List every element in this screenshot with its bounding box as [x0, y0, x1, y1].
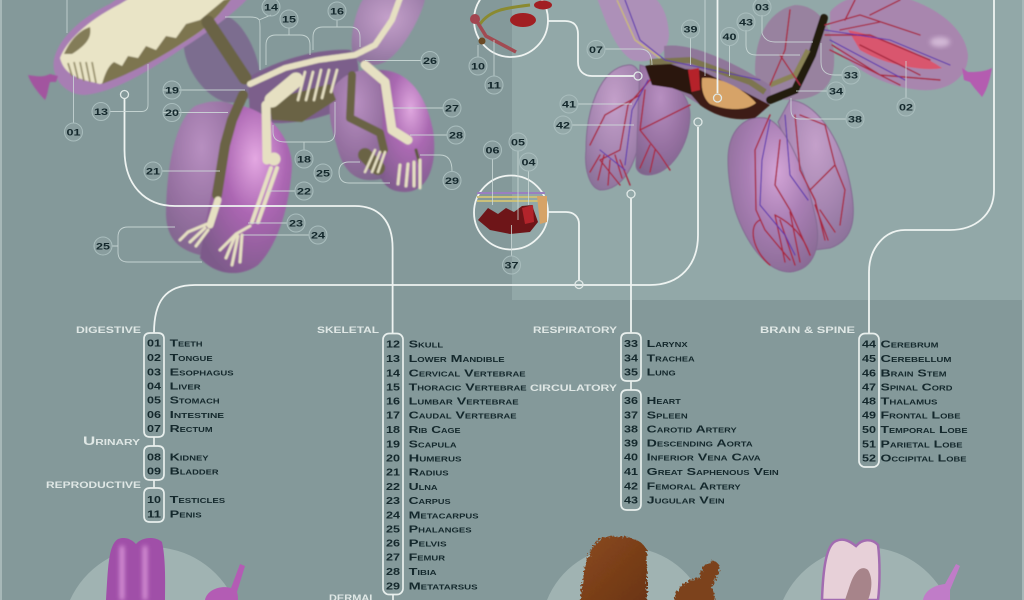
icon: colored aorta stripe	[617, 0, 660, 58]
rows 44-52: 52	[862, 452, 876, 464]
background disc	[783, 547, 947, 600]
rows 33-43: 36	[624, 395, 638, 407]
callout 38	[846, 110, 864, 128]
callout 04	[520, 153, 538, 171]
icon: tail balloon	[597, 0, 669, 61]
anatomy balloon dog	[586, 0, 992, 272]
callout 11: 11	[487, 80, 502, 92]
balloon segments	[106, 538, 165, 600]
cutaway segment	[822, 540, 880, 600]
callout 01: 01	[66, 128, 81, 138]
callout 03	[753, 0, 771, 16]
callout 21	[144, 162, 162, 180]
rows 12-29: 16	[386, 396, 400, 408]
callout 13: 13	[94, 107, 108, 118]
heading: urinary: Urinary	[83, 436, 141, 448]
rows 44-52: 46	[862, 367, 876, 379]
rows 12-29: 19	[386, 438, 400, 450]
rows 44-52: Cerebrum	[880, 339, 939, 351]
rows 12-29: 20	[386, 452, 400, 464]
callout 06	[484, 141, 502, 159]
rows 12-29: Rib Cage	[409, 424, 461, 436]
rows 12-29: Thoracic Vertebrae	[409, 381, 527, 393]
icon: balloon knot	[28, 74, 58, 100]
connector lines	[120, 0, 994, 333]
legend: respiratory and circulatory	[530, 325, 779, 510]
callout 43: 43	[739, 18, 753, 28]
icon: balloon highlight	[930, 37, 950, 47]
rows 12-29: 22	[386, 481, 400, 493]
callout 28: 28	[449, 130, 463, 142]
rows 01-11: 06	[147, 409, 161, 421]
rows 12-29: 18	[386, 424, 400, 436]
rows 12-29: Femur	[409, 552, 445, 564]
skeleton balloon dog	[28, 0, 434, 273]
detail circle: digestive organs	[474, 176, 548, 250]
number brackets	[621, 333, 641, 510]
icon: hind right balloon	[636, 65, 690, 175]
rows 12-29: 26	[386, 538, 400, 550]
callout 41	[560, 95, 578, 113]
icon: body tube	[650, 60, 765, 92]
rows 12-29: Scapula	[409, 438, 457, 450]
callout 28	[447, 126, 465, 144]
heading: brain and spine: BRAIN & SPINE	[760, 325, 855, 336]
callout 15	[280, 10, 298, 28]
callout 16	[328, 2, 346, 20]
rows 12-29: 28	[386, 566, 400, 578]
rows 33-43: 33	[624, 338, 638, 350]
callout 13	[92, 102, 110, 120]
fur groove	[611, 542, 613, 600]
rows 33-43: 34	[624, 352, 638, 364]
rows 12-29: Carpus	[409, 495, 451, 507]
callout 10: 10	[471, 62, 485, 72]
rows 01-11: Esophagus	[170, 366, 234, 378]
callout 27	[443, 99, 461, 117]
rows 44-52: Brain Stem	[880, 367, 947, 379]
callout 11	[485, 76, 503, 94]
rows 33-43: Larynx	[647, 338, 688, 350]
rows 12-29: Metatarsus	[409, 580, 478, 592]
rows 12-29: Lower Mandible	[409, 353, 505, 365]
rows 44-52: Frontal Lobe	[880, 410, 961, 422]
rows 44-52: Cerebellum	[880, 353, 952, 365]
lighter upper-right panel	[512, 0, 1022, 300]
rows 12-29: Ulna	[409, 481, 438, 493]
rows 33-43: 35	[624, 366, 638, 378]
callout 18	[295, 150, 313, 168]
highlights	[122, 546, 145, 600]
icon: head balloon	[830, 0, 968, 90]
icon: far-side bones	[208, 22, 384, 195]
rows 33-43	[624, 338, 779, 506]
icon: near front leg balloon	[200, 105, 292, 273]
rows 12-29: 13	[386, 353, 400, 365]
number bracket	[859, 334, 879, 467]
callout 05	[509, 133, 527, 151]
callout 22	[295, 182, 313, 200]
rows 44-52: 48	[862, 396, 876, 408]
callout 38: 38	[848, 114, 862, 126]
rows 44-52: 49	[862, 410, 876, 422]
rows 01-11: Tongue	[170, 352, 213, 364]
number bracket	[383, 334, 403, 594]
rows 01-11: Teeth	[170, 338, 203, 350]
callout 02	[897, 98, 915, 116]
callout 43	[737, 13, 755, 31]
icon: neck balloon	[184, 16, 260, 103]
callout 25 hind: 25	[316, 168, 331, 180]
rows 12-29: Pelvis	[409, 538, 447, 550]
icon: heart	[687, 68, 700, 92]
callout 24: 24	[311, 230, 326, 242]
rows 33-43: Carotid Artery	[647, 424, 737, 436]
callout 20	[163, 104, 181, 122]
callout 01	[64, 123, 82, 141]
heading: respiratory: RESPIRATORY	[533, 325, 618, 336]
callout 19	[163, 81, 181, 99]
callout 26	[421, 52, 439, 70]
rows 01-11: Kidney	[170, 452, 209, 464]
icon: far hind leg balloon	[329, 70, 389, 180]
rows 44-52: 51	[862, 438, 876, 450]
icon: neck balloon	[755, 5, 834, 100]
rows 44-52: 44	[862, 339, 876, 351]
rows 12-29: 25	[386, 523, 400, 535]
callout 16: 16	[330, 6, 344, 18]
detail circle: reproductive organs	[470, 0, 552, 57]
rows 12-29: 23	[386, 495, 400, 507]
rows 01-11: 08	[147, 452, 161, 464]
heading: skeletal: SKELETAL	[317, 325, 379, 336]
callout 42: 42	[556, 120, 570, 132]
callout 34: 34	[829, 86, 844, 98]
background disc	[547, 547, 703, 600]
icon: tail balloon	[352, 0, 425, 65]
rows 44-52: 45	[862, 353, 876, 365]
rows 33-43: 40	[624, 452, 638, 464]
callout 14	[262, 0, 280, 16]
callout 40: 40	[722, 32, 736, 43]
callout 15: 15	[282, 14, 297, 26]
callout 23: 23	[289, 218, 303, 230]
rows 12-29: 15	[386, 381, 400, 393]
rows 12-29: Tibia	[409, 566, 437, 578]
heading: digestive: DIGESTIVE	[76, 325, 141, 336]
rows 01-11: 05	[147, 395, 161, 407]
rows 01-11: 10	[147, 494, 161, 506]
callout 04: 04	[522, 158, 536, 168]
rows 44-52	[862, 339, 968, 464]
rows 12-29: Caudal Vertebrae	[409, 410, 517, 422]
callout 29	[443, 172, 461, 190]
rows 01-11: Stomach	[170, 395, 220, 407]
rows 33-43: Spleen	[647, 410, 688, 422]
heading: reproductive: REPRODUCTIVE	[46, 480, 141, 491]
rows 01-11: Testicles	[170, 494, 226, 506]
rows 33-43: 41	[624, 466, 638, 478]
icon: tongue	[848, 30, 942, 69]
callout 20: 20	[165, 108, 179, 119]
rows 01-11: Intestine	[170, 409, 225, 421]
rows 12-29: Metacarpus	[409, 509, 479, 521]
callout 24	[309, 226, 327, 244]
icon: nostril	[64, 27, 90, 54]
bracket connector	[392, 595, 394, 600]
number brackets	[144, 333, 164, 522]
rows 12-29: Phalanges	[409, 523, 472, 535]
icon: hind left balloon	[586, 65, 643, 190]
bottom figure: fur balloon dog	[547, 536, 719, 600]
rows 01-11: Rectum	[170, 423, 213, 435]
callout 18: 18	[297, 154, 311, 166]
callout 26: 26	[423, 56, 437, 67]
rows 33-43: Femoral Artery	[647, 480, 741, 492]
icon: cord	[770, 50, 808, 85]
rows 01-11	[147, 338, 234, 520]
rows 01-11: 04	[147, 380, 161, 392]
callout 02: 02	[899, 102, 913, 114]
rows 12-29: Humerus	[409, 452, 462, 464]
callout 37	[502, 256, 520, 274]
rows 33-43: Inferior Vena Cava	[647, 452, 761, 464]
rows 12-29: 27	[386, 552, 400, 564]
rows 33-43: Heart	[647, 395, 682, 407]
callout 34	[827, 82, 845, 100]
rows 12-29	[386, 339, 527, 592]
rows 33-43: Descending Aorta	[647, 438, 753, 450]
rows 33-43: Great Saphenous Vein	[647, 466, 779, 478]
icon: far front leg balloon	[166, 101, 245, 255]
ring markers	[120, 72, 722, 288]
icon: balloon knot	[962, 68, 992, 97]
rows 44-52: Parietal Lobe	[880, 438, 963, 450]
callout 03: 03	[755, 2, 769, 14]
callout 39: 39	[684, 24, 698, 36]
rows 44-52: 50	[862, 424, 876, 436]
rows 33-43: 42	[624, 480, 638, 492]
icon: near hind leg balloon	[375, 70, 434, 192]
rows 01-11: 07	[147, 423, 161, 435]
icon: skull	[60, 0, 232, 84]
inner structure	[845, 568, 871, 600]
icon: body balloon	[664, 45, 771, 118]
callout 39	[682, 20, 700, 38]
callout 05: 05	[511, 138, 526, 148]
rows 12-29: Skull	[409, 339, 444, 351]
rows 12-29: Cervical Vertebrae	[409, 367, 526, 379]
callout 14: 14	[264, 2, 279, 14]
rows 01-11: 11	[147, 508, 161, 520]
callout 25 front	[94, 237, 112, 255]
rows 44-52: 47	[862, 381, 876, 393]
rows 01-11: 09	[147, 466, 161, 478]
rows 01-11: 03	[147, 366, 161, 378]
heading: circulatory: CIRCULATORY	[530, 383, 618, 394]
rows 01-11: 01	[147, 338, 161, 350]
bottom figure: cutaway balloon dog	[783, 540, 960, 600]
icon: dark gut tissue	[645, 62, 692, 95]
rows 12-29: 17	[386, 410, 400, 422]
icon: body balloon	[248, 50, 358, 123]
callout 25 hind	[314, 164, 332, 182]
icon: chest cavity	[268, 84, 336, 122]
rows 12-29: Radius	[409, 467, 449, 479]
rows 44-52: Spinal Cord	[880, 381, 952, 393]
fur segments	[580, 536, 647, 600]
callout 10	[469, 57, 487, 75]
legend: brain and spine	[760, 325, 968, 467]
bottom figure: purple balloon dog	[70, 538, 245, 600]
icon: near-side bones	[180, 0, 420, 265]
rows 12-29: 29	[386, 580, 400, 592]
legend: digestive, urinary, reproductive	[46, 325, 234, 522]
callout 06: 06	[486, 146, 500, 156]
callout 21: 21	[146, 166, 161, 178]
fur tail	[673, 561, 719, 600]
icon: jaw and teeth	[102, 0, 232, 84]
legend: skeletal	[317, 325, 527, 600]
rows 12-29: 12	[386, 339, 400, 351]
icon: blue vessels	[600, 0, 950, 255]
callout 19: 19	[165, 86, 179, 96]
icon: spine and trachea	[770, 18, 824, 100]
icon: head balloon	[54, 0, 248, 95]
rows 33-43: Jugular Vein	[647, 494, 725, 506]
rows 33-43: 43	[624, 494, 638, 506]
tail balloon	[923, 564, 960, 600]
callout 27: 27	[445, 104, 459, 114]
callout numbers	[64, 0, 915, 274]
callout 29: 29	[445, 176, 459, 187]
rows 12-29: 21	[386, 467, 400, 479]
callout 07: 07	[589, 45, 603, 56]
rows 12-29: 14	[386, 367, 400, 379]
rows 33-43: Trachea	[647, 352, 695, 364]
icon: liver organ	[702, 78, 756, 109]
icon: front teeth	[68, 62, 96, 83]
callout 23	[287, 214, 305, 232]
icon: red vessels	[590, 0, 940, 265]
icon: front right balloon	[778, 100, 853, 250]
rows 33-43: Lung	[647, 366, 676, 378]
callout 33: 33	[844, 70, 858, 82]
icon: front left balloon	[728, 118, 818, 272]
callout 22: 22	[297, 186, 311, 198]
tail balloon	[205, 564, 245, 600]
rows 44-52: Occipital Lobe	[880, 452, 967, 464]
rows 01-11: 02	[147, 352, 161, 364]
rows 01-11: Bladder	[170, 466, 219, 478]
rows 44-52: Temporal Lobe	[880, 424, 968, 436]
rows 01-11: Penis	[170, 508, 202, 520]
rows 44-52: Thalamus	[880, 396, 938, 408]
rows 12-29: 24	[386, 509, 400, 521]
callout 40	[720, 28, 738, 46]
callout 25 front: 25	[96, 242, 111, 252]
rows 33-43: 37	[624, 410, 638, 422]
background disc	[70, 547, 234, 600]
callout 42	[554, 116, 572, 134]
callout 41: 41	[562, 100, 577, 110]
callout 37: 37	[504, 260, 518, 272]
callout 07	[587, 40, 605, 58]
callout 33	[842, 66, 860, 84]
icon: intestine and stomach	[668, 68, 770, 119]
thin leader lines	[67, 0, 906, 262]
rows 12-29: Lumbar Vertebrae	[409, 396, 519, 408]
rows 33-43: 39	[624, 438, 638, 450]
rows 33-43: 38	[624, 424, 638, 436]
rows 01-11: Liver	[170, 380, 201, 392]
